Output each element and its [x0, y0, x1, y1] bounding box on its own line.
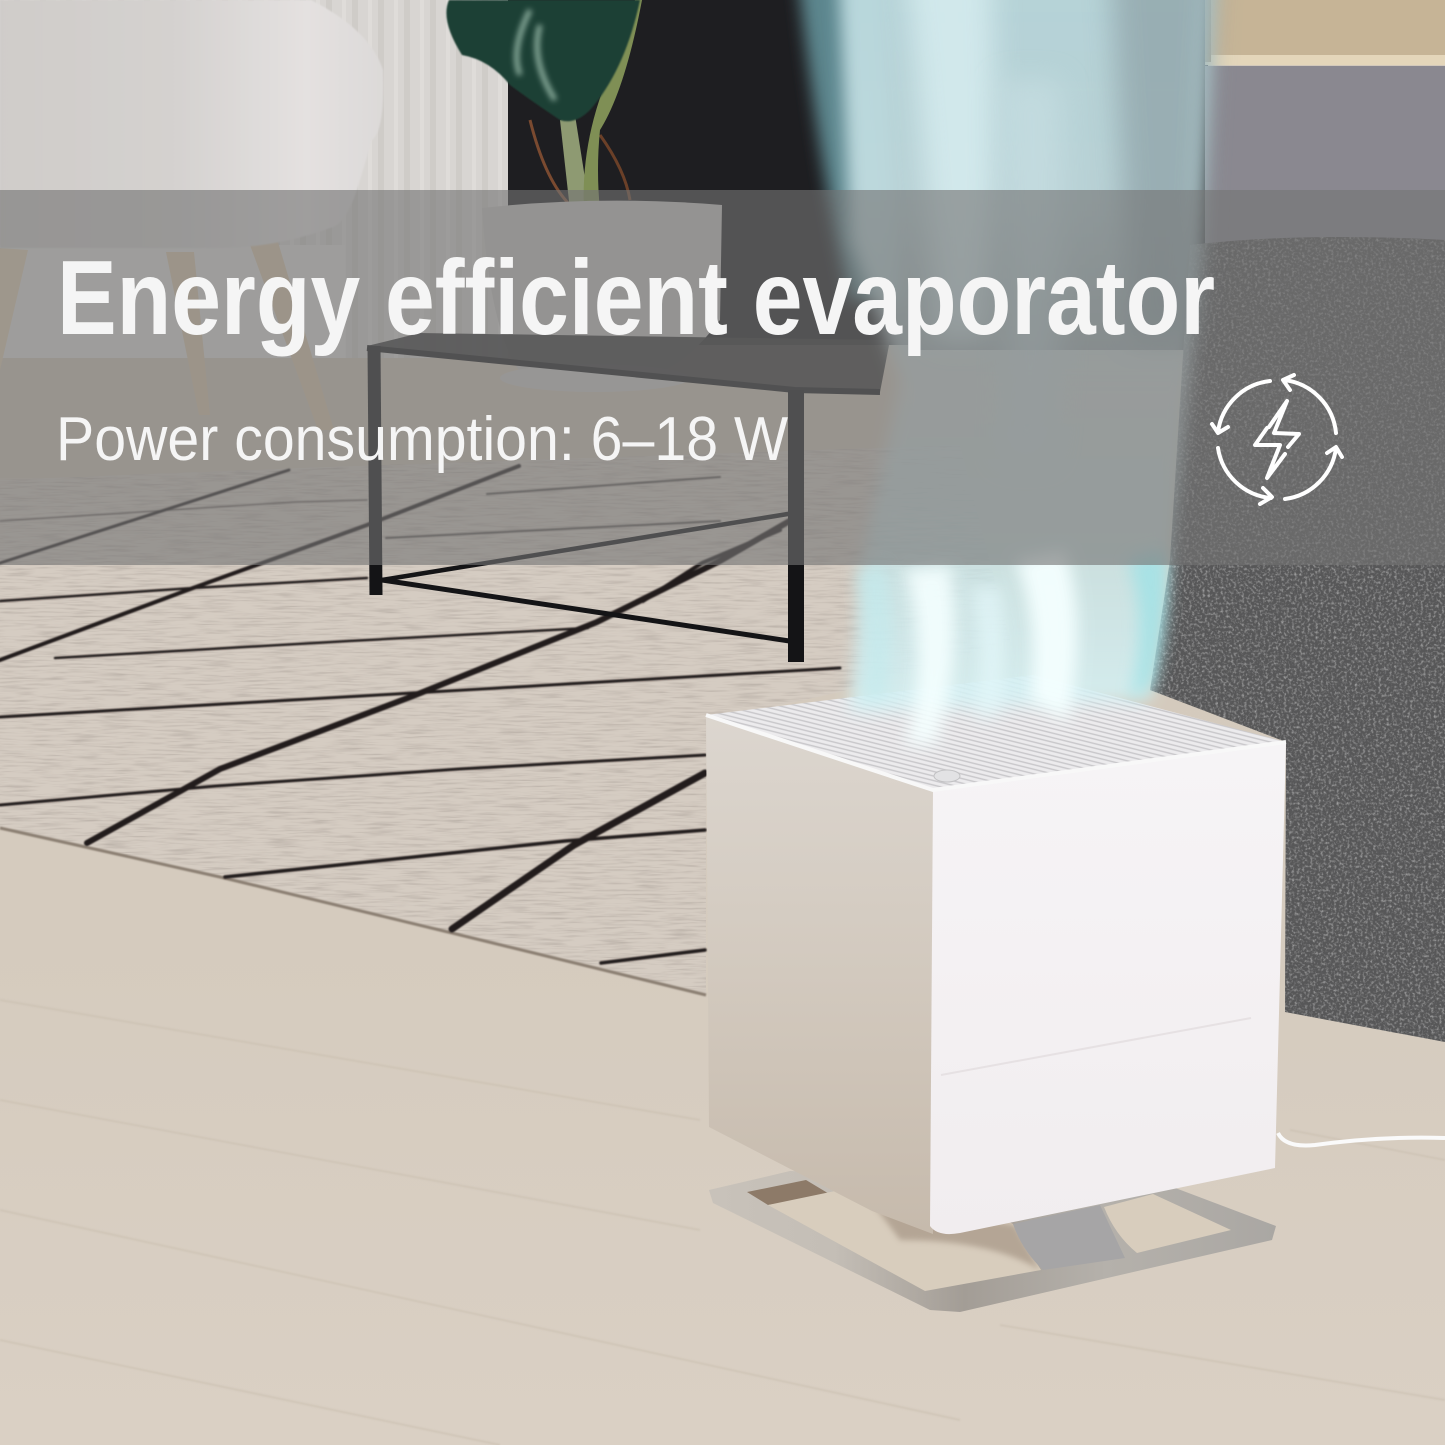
stand stem	[1013, 1205, 1125, 1270]
cycle arrow: bottom left	[1218, 448, 1272, 504]
translucent grey text band	[0, 190, 1445, 565]
cycle arrow: bottom right	[1285, 447, 1342, 499]
title: Energy efficient evaporator	[57, 239, 1215, 357]
carpet	[0, 445, 1010, 995]
top edge highlight	[706, 715, 1286, 790]
base centre opening	[768, 1190, 1041, 1291]
floor planks	[0, 1000, 1445, 1445]
mist plume	[796, 0, 1215, 745]
base right opening	[1104, 1194, 1231, 1253]
cycle arrow: top left	[1212, 381, 1270, 433]
cast shadow under body	[870, 1200, 1040, 1270]
cycle arrow: top right	[1283, 375, 1336, 433]
icon: energy cycle with lightning bolt	[1212, 375, 1342, 504]
right face	[930, 742, 1286, 1234]
seam	[941, 1018, 1251, 1075]
sofa pouf	[1150, 237, 1445, 1042]
power cable	[1278, 1133, 1445, 1146]
base left slot	[747, 1180, 831, 1205]
coffee table	[367, 333, 890, 662]
potted plant	[446, 0, 722, 392]
metal base	[709, 1171, 1276, 1312]
humidifier	[706, 675, 1286, 1312]
left face	[706, 715, 933, 1234]
top grille	[706, 675, 1286, 790]
lightning bolt	[1255, 401, 1299, 478]
control knob	[934, 770, 960, 782]
armchair	[0, 0, 383, 430]
subtitle: power consumption: Power consumption: 6–18 W	[56, 405, 788, 474]
